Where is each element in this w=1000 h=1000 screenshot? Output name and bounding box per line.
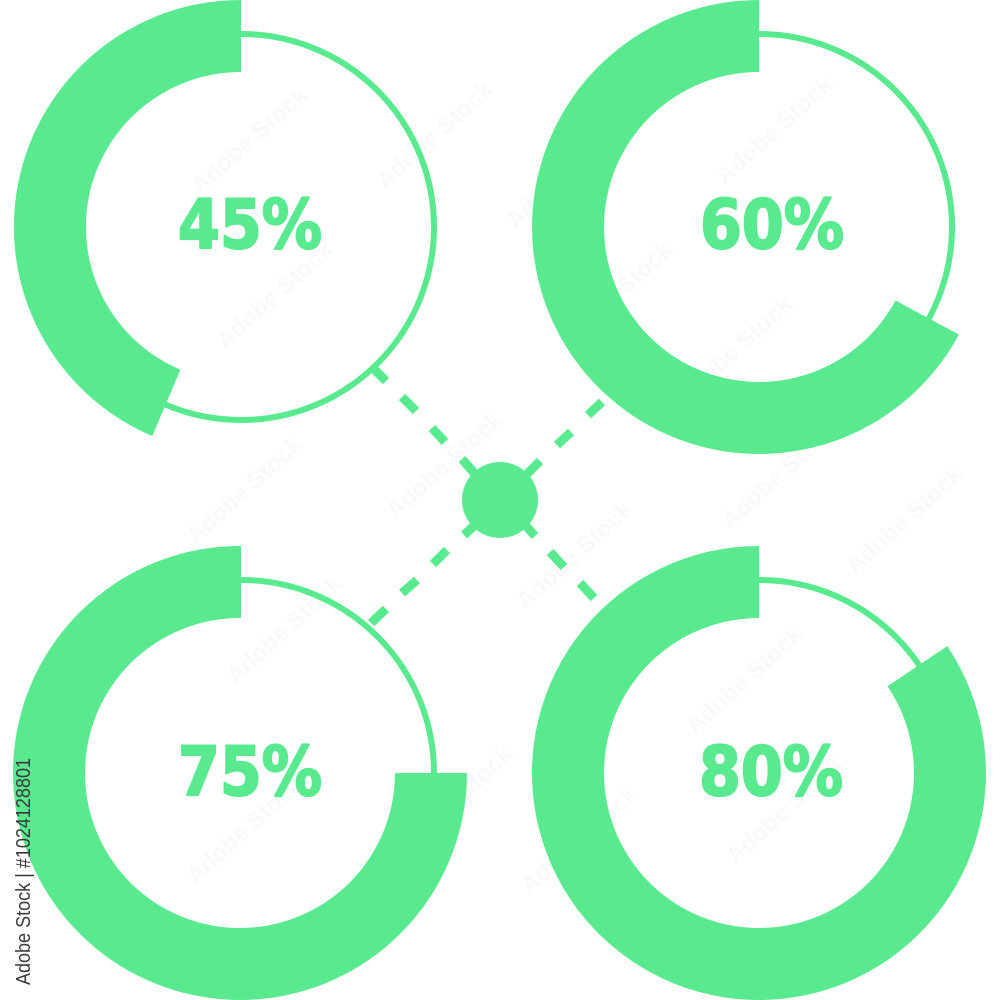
label 45%: 45% xyxy=(178,186,322,265)
label 60%: 60% xyxy=(700,186,844,265)
donut chart: 60% xyxy=(532,0,959,454)
thick arc 80% xyxy=(532,546,986,1000)
thin ring 45% xyxy=(48,34,434,420)
thin ring 75% xyxy=(48,580,434,966)
watermark pattern xyxy=(16,66,969,899)
watermark pattern: Adobe Stock xyxy=(381,406,509,524)
watermark pattern: Adobe Stock xyxy=(211,236,339,354)
watermark pattern: Adobe Stock xyxy=(681,621,809,739)
watermark pattern: Adobe Stock xyxy=(711,71,839,189)
thick arc 45% xyxy=(14,0,241,436)
stock id side label: Adobe Stock | #1024128801 xyxy=(13,758,35,985)
thick arc 75% xyxy=(13,546,467,1000)
watermark pattern: Adobe Stock xyxy=(671,291,799,409)
donut chart: 45% xyxy=(14,0,434,436)
donut chart: 75% xyxy=(13,546,467,1000)
dashed connector: bottom-right xyxy=(525,525,594,598)
watermark pattern: Adobe Stock xyxy=(501,116,629,234)
dashed connector: top-left xyxy=(373,368,475,474)
thin ring 80% xyxy=(566,580,952,966)
watermark pattern: Adobe Stock xyxy=(41,66,169,184)
watermark pattern: Adobe Stock xyxy=(551,236,679,354)
watermark pattern: Adobe Stock xyxy=(371,76,499,194)
watermark pattern: Adobe Stock xyxy=(181,431,309,549)
watermark pattern: Adobe Stock xyxy=(511,496,639,614)
watermark pattern: Adobe Stock xyxy=(716,416,844,534)
watermark pattern: Adobe Stock xyxy=(16,601,144,719)
watermark pattern: Adobe Stock xyxy=(186,81,314,199)
dashed connector: top-right xyxy=(525,402,602,476)
label 75%: 75% xyxy=(178,733,322,812)
watermark pattern: Adobe Stock xyxy=(516,781,644,899)
label 80%: 80% xyxy=(699,733,843,812)
central hub xyxy=(462,462,538,538)
thin ring 60% xyxy=(566,34,952,420)
watermark pattern: Adobe Stock xyxy=(721,751,849,869)
watermark pattern: Adobe Stock xyxy=(551,581,679,699)
watermark pattern: Adobe Stock xyxy=(221,571,349,689)
dashed connector: bottom-left xyxy=(371,525,475,623)
watermark pattern: Adobe Stock xyxy=(181,771,309,889)
thick arc 60% xyxy=(532,0,959,454)
donut chart: 80% xyxy=(532,546,986,1000)
watermark pattern: Adobe Stock xyxy=(391,741,519,859)
watermark pattern: Adobe Stock xyxy=(841,461,969,579)
